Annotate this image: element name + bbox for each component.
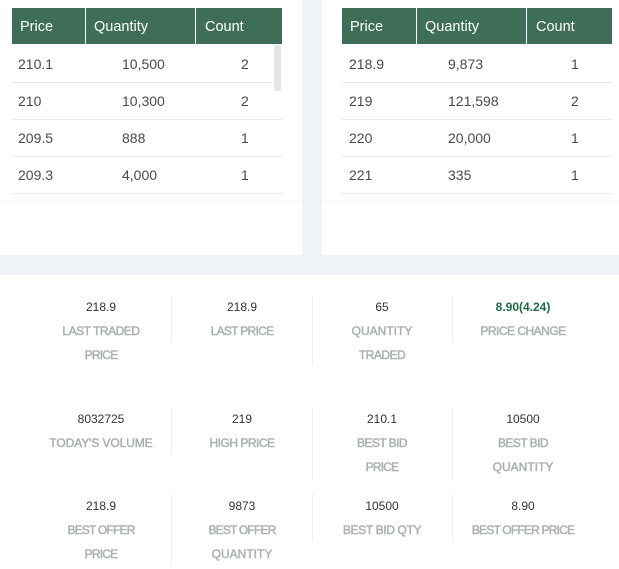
stat: best offer price: BEST OFFER xyxy=(67,523,135,537)
stat: high price: HIGH PRICE xyxy=(209,436,274,450)
stat: best bid qty: BEST BID QTY xyxy=(343,523,421,537)
stat: last price: LAST PRICE xyxy=(211,324,273,338)
panel: left order table: 10,300 xyxy=(122,93,165,109)
stat: quantity traded: QUANTITY xyxy=(352,324,412,338)
stat: best bid price xyxy=(357,412,408,474)
panel: right order table: 2 xyxy=(571,93,579,109)
panel: right order table: 218.9 xyxy=(349,56,384,72)
panel: right order table: 1 xyxy=(571,167,579,183)
panel: left order table: 2 xyxy=(241,93,249,109)
panel: left order table: 2 xyxy=(241,56,249,72)
stat: price change xyxy=(480,300,566,338)
stat: high price xyxy=(209,412,275,450)
stat: quantity traded xyxy=(352,300,412,362)
table header: Price xyxy=(350,19,383,35)
stat: price change: PRICE CHANGE xyxy=(480,324,566,338)
stat: best offer price value: 8.90 xyxy=(511,499,535,513)
stat: today's volume: TODAY'S VOLUME xyxy=(49,436,153,450)
stat: best offer quantity: BEST OFFER xyxy=(208,523,276,537)
stat: quantity traded: TRADED xyxy=(359,348,405,362)
panel: left order table: 10,500 xyxy=(122,56,165,72)
stat: best bid price: PRICE xyxy=(366,460,398,474)
stat: best bid price: 210.1 xyxy=(367,412,397,426)
stat: best bid quantity: BEST BID xyxy=(498,436,548,450)
panel: right order table: 1 xyxy=(571,56,579,72)
stat: best bid qty: 10500 xyxy=(365,499,399,513)
panel: right order table: 335 xyxy=(448,167,471,183)
stat: best offer price xyxy=(67,499,136,561)
panel: right order table: 220 xyxy=(349,130,372,146)
stat: last traded price xyxy=(62,300,140,362)
table header: Quantity xyxy=(94,19,148,35)
stat: best offer price: 218.9 xyxy=(86,499,116,513)
stat: quantity traded: 65 xyxy=(375,300,389,314)
scrollbar xyxy=(274,45,281,91)
panel: left order table xyxy=(12,8,282,194)
stat: last price xyxy=(211,300,274,338)
stat: last traded price: 218.9 xyxy=(86,300,116,314)
panel: left order table: 209.3 xyxy=(18,167,53,183)
stat: best offer quantity xyxy=(208,499,276,561)
stat: best offer price: PRICE xyxy=(85,547,117,561)
stat: best bid quantity: 10500 xyxy=(506,412,540,426)
stat: best bid price: BEST BID xyxy=(357,436,407,450)
background gutters xyxy=(302,0,322,275)
table header xyxy=(342,8,612,44)
panel: left order table: 209.5 xyxy=(18,130,53,146)
stat: last traded price: PRICE xyxy=(85,348,117,362)
stat: best offer price value: BEST OFFER PRICE xyxy=(472,523,574,537)
table header: Count xyxy=(205,19,244,35)
stat: last traded price: LAST TRADED xyxy=(62,324,140,338)
panel: left order table: 1 xyxy=(241,130,249,146)
stat: high price: 219 xyxy=(232,412,252,426)
panel: right order table: 1 xyxy=(571,130,579,146)
panel: right order table xyxy=(342,8,612,194)
panel: left order table: 888 xyxy=(122,130,145,146)
stat: last price: 218.9 xyxy=(227,300,257,314)
panel: left order table: 1 xyxy=(241,167,249,183)
panel: right order table: 20,000 xyxy=(448,130,491,146)
stat: best bid quantity xyxy=(493,412,554,474)
stat: best bid qty xyxy=(343,499,422,537)
panel: right order table: 221 xyxy=(349,167,372,183)
stat: best offer quantity: 9873 xyxy=(229,499,255,513)
table header: Quantity xyxy=(425,19,479,35)
panel: right order table: 121,598 xyxy=(448,93,499,109)
stat: best offer quantity: QUANTITY xyxy=(212,547,272,561)
panel: right order table: 219 xyxy=(349,93,372,109)
stat: today's volume: 8032725 xyxy=(78,412,124,426)
panel: market statistics xyxy=(49,296,575,566)
stat: today's volume xyxy=(49,412,153,450)
stat: best offer price value xyxy=(472,499,575,537)
panel: left order table: 210 xyxy=(18,93,41,109)
panel: right order table: 9,873 xyxy=(448,56,483,72)
table header: Price xyxy=(20,19,53,35)
table header: Count xyxy=(536,19,575,35)
stat: best bid quantity: QUANTITY xyxy=(493,460,553,474)
stat: price change: 8.90(4.24) xyxy=(496,300,550,314)
panel: left order table: 4,000 xyxy=(122,167,157,183)
panel: left order table: 210.1 xyxy=(18,56,53,72)
table header xyxy=(12,8,282,44)
